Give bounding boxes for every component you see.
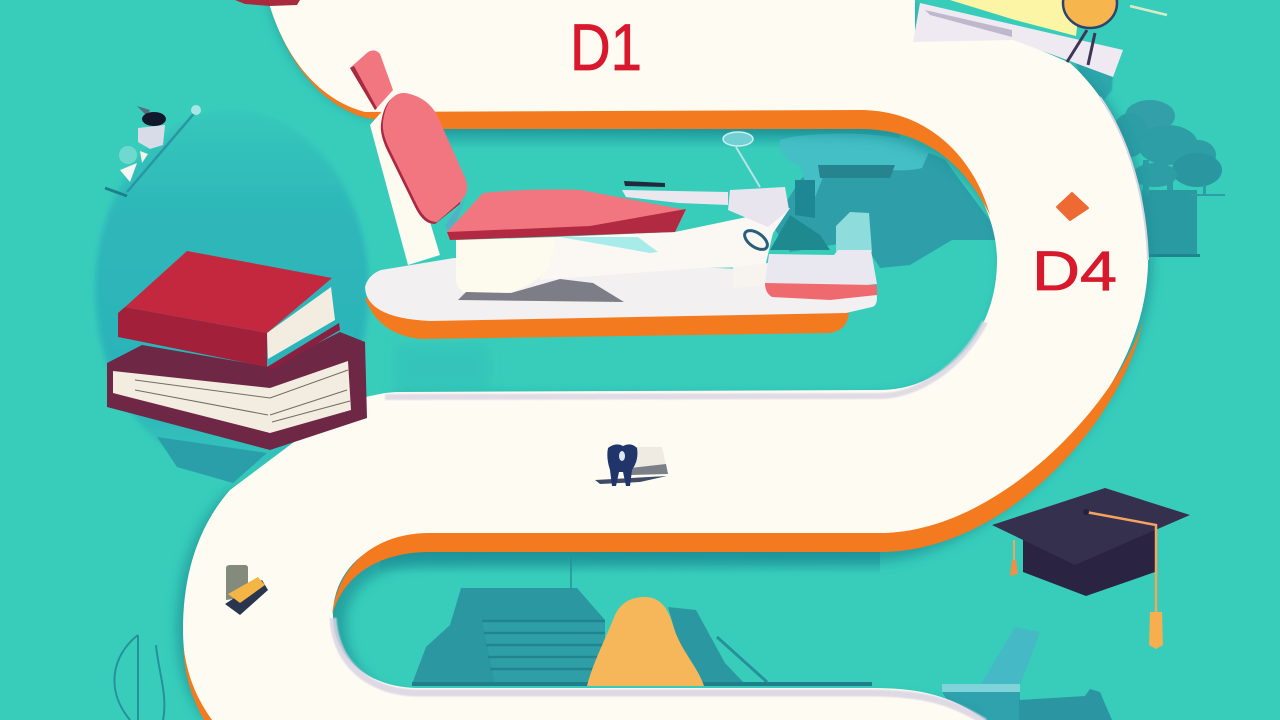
icon: top left red book corner [235,0,300,6]
icon: small eraser and block [225,565,268,615]
label: D4: D4 [1032,239,1117,302]
icon: chair bottom right [942,627,1112,720]
icon: left plant [114,635,164,720]
scene: building behind the upper road [770,134,997,268]
seat cushion [447,189,686,240]
shadow under books [157,437,267,483]
orange edge: lower left road [183,645,212,720]
cup holder [733,263,768,288]
dental lamp [723,132,760,187]
chair platform [365,258,877,321]
upper book spine [118,307,267,367]
icon: stack of books [107,251,367,483]
chair platform orange base [365,298,849,339]
chair body [540,208,790,280]
scene: building in the lower gap [412,558,872,686]
hose loop [741,227,771,253]
shade under lower orange band [380,550,880,574]
chair pedestal [456,237,556,297]
side cabinet [765,250,877,300]
lower book cover [107,332,367,450]
road [183,0,1148,720]
icon: tooth and book [595,444,668,486]
icon: tree group right [1112,100,1225,257]
icon: orange bell shape [587,597,704,686]
icon: scroll shadow [1075,60,1113,100]
road inner edge shading [333,97,1148,720]
grey foot [458,279,624,302]
icon: dental chair [350,50,877,339]
label: D1: D1 [570,10,642,84]
soft shape below the chair [395,345,490,390]
arm rest [622,181,789,227]
icon: scroll and yellow paper [913,0,1167,77]
icon: dental tools top left [105,105,201,196]
upper book pages [267,287,335,359]
icon: graduation cap [992,488,1190,649]
road shadow [177,0,1152,720]
chair back frame [370,108,440,265]
headrest [350,50,393,110]
pale teal wedge [560,237,658,253]
lower book pages [113,361,351,433]
darker background disc [95,110,369,470]
upper book cover [125,251,332,333]
orange edge: middle road [332,320,1143,615]
seat back [381,93,467,236]
upper book back cover lip [267,323,340,370]
icon: orange diamond marker [1057,193,1088,220]
orange edge: upper road [268,0,990,215]
glass cups [836,212,872,252]
shade under upper orange band [430,127,900,149]
